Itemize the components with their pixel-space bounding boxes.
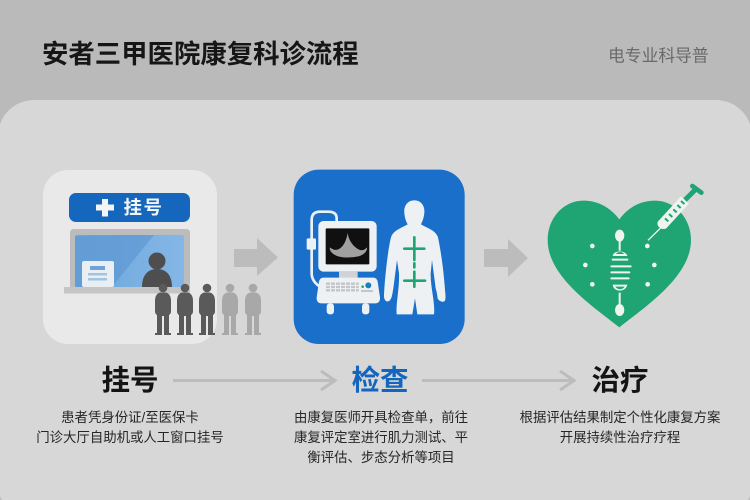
step heading: registration: 挂号 bbox=[101, 365, 159, 397]
step heading: treatment: 治疗 bbox=[591, 365, 649, 397]
title: 安者三甲医院康复科诊流程 bbox=[42, 39, 359, 69]
card background bbox=[294, 170, 465, 344]
panel: process background bbox=[0, 100, 750, 500]
text: examination description: 康复评定室进行肌力测试、平 bbox=[294, 429, 468, 445]
text: examination description: 由康复医师开具检查单，前往 bbox=[294, 409, 468, 425]
text: examination description: 衡评估、步态分析等项目 bbox=[307, 449, 455, 465]
text: treatment description: 开展持续性治疗疗程 bbox=[560, 430, 680, 445]
text: treatment description bbox=[520, 409, 721, 445]
icon: examination equipment and body bbox=[294, 170, 465, 344]
syringe bbox=[648, 186, 701, 240]
arrow: examination to treatment bbox=[422, 371, 574, 390]
icon: heart with spine and syringe bbox=[548, 186, 701, 327]
arrow: step two to step three bbox=[484, 239, 528, 277]
step heading: examination: 检查 bbox=[351, 365, 409, 397]
text: treatment description: 根据评估结果制定个性化康复方案 bbox=[520, 409, 721, 425]
brand text: 电专业科导普 bbox=[608, 46, 709, 66]
heart bbox=[548, 201, 691, 327]
icon: registration window bbox=[43, 170, 261, 344]
text: registration description: 患者凭身份证/至医保卡 bbox=[61, 410, 199, 425]
spine bbox=[583, 230, 657, 316]
service window bbox=[64, 229, 190, 294]
text: registration description: 门诊大厅自助机或人工窗口挂号 bbox=[36, 429, 224, 445]
text: registration description bbox=[36, 410, 224, 445]
queue of people bbox=[155, 284, 261, 335]
arrow: step one to step two bbox=[234, 238, 278, 276]
card background bbox=[43, 170, 217, 344]
human body bbox=[384, 200, 446, 314]
text: examination description bbox=[294, 409, 468, 465]
registration sign bbox=[69, 193, 190, 222]
registration sign: 挂号 bbox=[123, 197, 164, 218]
arrow: registration to examination bbox=[173, 371, 335, 390]
ultrasound machine bbox=[307, 212, 380, 314]
